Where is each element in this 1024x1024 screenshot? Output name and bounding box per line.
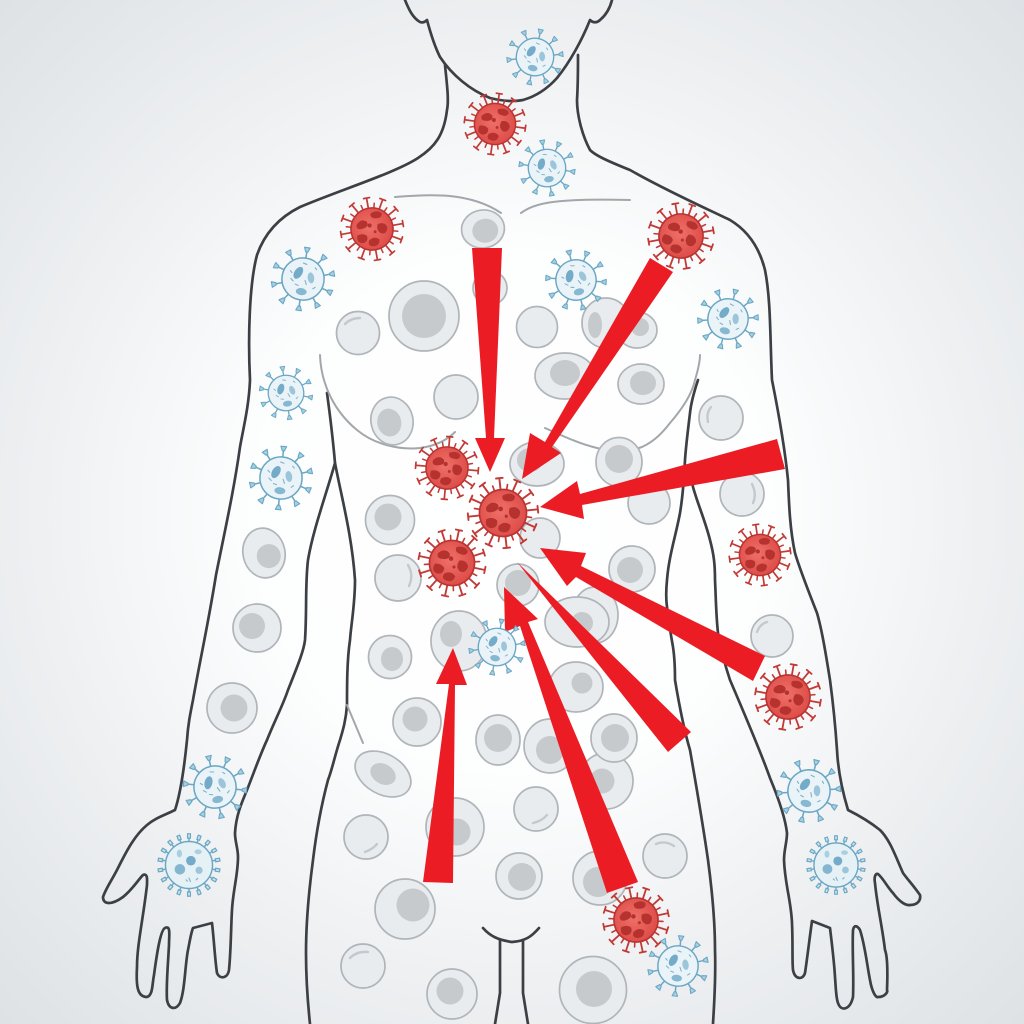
cell xyxy=(618,364,664,404)
cell xyxy=(549,662,603,712)
blue virus xyxy=(247,444,315,512)
cell xyxy=(375,555,421,601)
cell xyxy=(476,715,520,765)
arrow from upper chest xyxy=(472,248,505,472)
cell xyxy=(393,698,441,746)
blue virus xyxy=(645,933,711,999)
red virus xyxy=(639,194,723,278)
arrow from right shoulder xyxy=(522,258,673,479)
cell xyxy=(238,524,290,582)
cell xyxy=(643,834,687,878)
blue virus xyxy=(465,615,529,679)
red virus xyxy=(750,659,826,735)
cell xyxy=(582,298,630,348)
groin and inner legs xyxy=(483,928,539,1024)
cell xyxy=(431,611,487,671)
cell xyxy=(207,683,257,733)
red virus xyxy=(336,193,408,265)
cell xyxy=(596,438,642,486)
cell xyxy=(496,853,542,899)
cell xyxy=(699,396,743,440)
blue virus xyxy=(268,243,338,315)
blue virus xyxy=(692,282,764,356)
blue virus xyxy=(540,243,612,317)
cell xyxy=(341,944,385,988)
cell xyxy=(366,393,418,449)
right torso side xyxy=(666,380,715,1024)
blue virus with short spikes xyxy=(158,834,220,896)
chest and hip lines xyxy=(320,195,700,743)
body outline xyxy=(103,0,920,1024)
cell xyxy=(368,636,412,678)
cell xyxy=(520,518,560,558)
cell xyxy=(535,353,595,399)
arrow from right arm xyxy=(540,439,785,519)
left neck, shoulder, arm and hand outline xyxy=(103,65,448,1008)
cell xyxy=(573,851,627,905)
right neck, shoulder, arm and hand outline xyxy=(577,55,920,1009)
red virus xyxy=(725,520,795,590)
arrow from right forearm xyxy=(540,548,765,681)
red virus xyxy=(412,523,492,603)
head and jaw outline xyxy=(405,0,612,101)
left torso side xyxy=(306,393,355,1024)
cell xyxy=(516,306,558,348)
red virus xyxy=(460,89,530,159)
cell xyxy=(366,496,414,544)
cell xyxy=(389,281,459,351)
cell xyxy=(545,597,609,647)
arrow from lower right xyxy=(504,587,638,893)
cell xyxy=(720,472,764,516)
cell xyxy=(628,482,670,524)
cell xyxy=(751,615,793,657)
cell xyxy=(473,271,507,305)
cell xyxy=(617,312,657,348)
cell xyxy=(426,798,484,856)
blue virus with short spikes xyxy=(807,836,865,894)
wedge arrow from right hip xyxy=(517,562,691,752)
cell xyxy=(427,969,477,1019)
red viruses xyxy=(336,89,826,959)
cell xyxy=(375,879,435,939)
cell xyxy=(347,742,419,806)
cell xyxy=(459,207,507,251)
blue virus xyxy=(256,363,316,423)
cell xyxy=(524,719,576,773)
cell xyxy=(434,375,478,419)
cell xyxy=(572,587,618,643)
arrow from lower left xyxy=(423,648,467,883)
blue viruses xyxy=(158,24,865,999)
cell xyxy=(233,604,281,652)
blue virus xyxy=(178,750,252,824)
cell xyxy=(336,312,380,354)
blue virus xyxy=(771,753,847,829)
cell xyxy=(560,956,626,1024)
cell xyxy=(591,714,637,762)
arrows converging on the central virus xyxy=(423,248,785,893)
red virus: central target xyxy=(464,474,542,552)
blue virus xyxy=(502,24,568,90)
cell xyxy=(510,442,564,486)
cell xyxy=(497,564,539,606)
cell xyxy=(609,546,655,592)
cell xyxy=(344,815,388,859)
red virus xyxy=(597,881,675,959)
blue virus xyxy=(515,136,579,200)
red virus xyxy=(413,434,481,502)
cells xyxy=(207,207,793,1024)
cell xyxy=(514,787,558,831)
cell xyxy=(579,753,633,809)
